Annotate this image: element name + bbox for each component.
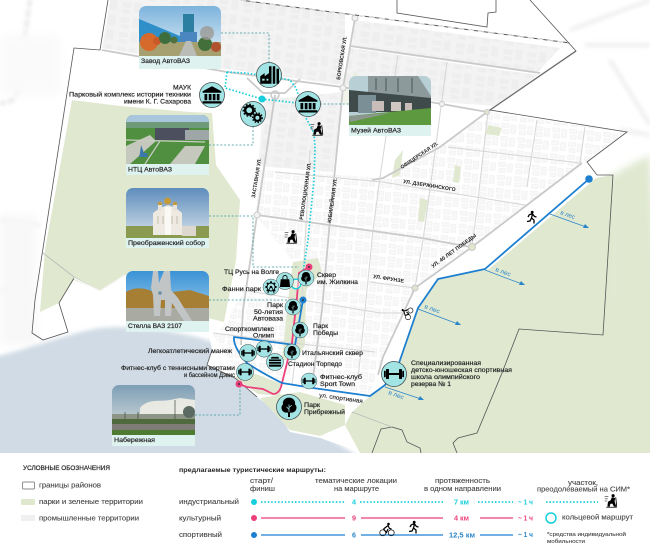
row: cultural: 9 (352, 514, 356, 522)
row: cultural (179, 514, 533, 522)
icon: dumbbell школа (382, 362, 406, 386)
legend: routes table: преодолеваемый на СИМ* (537, 486, 630, 494)
forest area (345, 175, 650, 453)
arrows: to the forest (385, 209, 589, 401)
route: sport (234, 175, 593, 396)
legend: map symbols: парки и зеленые территории (39, 499, 143, 506)
location labels: и бассейном Дэвис (184, 371, 236, 379)
street names: ЗАСТАВНАЯ УЛ. (251, 157, 263, 198)
photo card: НТЦ АвтоВАЗ: НТЦ АвтоВАЗ (128, 166, 172, 174)
street names: УЛ. ДЗЕРЖИНСКОГО (403, 179, 456, 193)
photo card: Завод АвтоВАЗ: Завод АвтоВАЗ (141, 58, 190, 65)
residential (255, 112, 627, 393)
street names: ул. спортивная (319, 393, 363, 405)
icon: museum МАУК (200, 82, 224, 108)
dashed leader lines (195, 33, 349, 415)
icon: cyclist (399, 305, 414, 320)
photo card: Стелла ВАЗ 2107: Стелла ВАЗ 2107 (128, 323, 182, 330)
location labels: Легкоатлетический манеж (148, 347, 233, 355)
legend: routes table: тематические локации (315, 478, 397, 485)
icon: tree Парк 50-летия (285, 299, 301, 315)
street names: ЮБИЛЕЙНАЯ УЛ. (325, 177, 339, 223)
route: cultural (236, 264, 312, 394)
row: cultural: 4 км (454, 514, 469, 522)
footnote (547, 531, 626, 545)
legend: map symbols: границы районов (39, 482, 101, 490)
icon: scooter rider south (285, 230, 297, 243)
location labels: Парковый комплекс истории техники (69, 90, 191, 98)
row: sport: спортивный (179, 531, 222, 539)
icon: Музей АвтоВАЗ (296, 92, 320, 116)
photo card: Завод АвтоВАЗ (139, 6, 221, 69)
icon: ferris wheel (263, 279, 279, 295)
street names: РЕВОЛЮЦИОННАЯ УЛ. (299, 162, 313, 220)
row: industrial (179, 498, 598, 506)
street names: БОРКОВСКАЯ УЛ. (336, 35, 349, 80)
location labels: им. Жилкина (317, 279, 358, 286)
legend: routes table: старт/ (250, 478, 273, 485)
icon: factory (256, 62, 282, 88)
location labels: резерва № 1 (411, 381, 451, 388)
district boundaries (32, 0, 108, 340)
legend: routes table (179, 467, 634, 545)
location labels: имени К. Г. Сахарова (124, 98, 191, 106)
legend: map symbols (21, 465, 143, 522)
city parks (282, 258, 322, 360)
legend: map symbols: УСЛОВНЫЕ ОБОЗНАЧЕНИЯ (23, 465, 110, 472)
photo card: Музей АвтоВАЗ (349, 76, 431, 136)
location labels: Прибрежный (304, 408, 345, 416)
park zone west (40, 100, 240, 322)
row: sport: 6 (352, 530, 356, 540)
railway (240, 0, 570, 43)
icon: tree Парк Победы (292, 322, 308, 338)
location labels: ТЦ Русь на Волге (224, 269, 279, 276)
icon: shopping bag (276, 272, 294, 290)
legend: ring route: кольцевой маршрут (562, 514, 634, 522)
icon: stadium (266, 354, 284, 370)
roads (102, 50, 487, 112)
location labels: Итальянский сквер (302, 349, 363, 357)
icon: tree Итальянский сквер (284, 344, 300, 360)
icon: legend cyclist (380, 523, 394, 536)
photo card: Музей АвтоВАЗ: Музей АвтоВАЗ (351, 126, 401, 134)
location labels: Стадион Торпедо (288, 361, 342, 368)
legend: routes table: участок, (568, 480, 598, 487)
legend: map symbols: промышленные территории (39, 516, 139, 522)
icon: dumbbell Дэвис (236, 364, 254, 380)
icon: dumbbell Олимп (256, 341, 272, 357)
forest fading edge (608, 155, 650, 320)
icon: runner (527, 211, 536, 224)
icon: gears НТЦ (240, 102, 266, 126)
location labels: детско-юношеская спортивная (411, 367, 512, 374)
route: industrial (225, 72, 315, 272)
row: cultural: культурный (179, 514, 221, 522)
industrial zones (102, 0, 345, 85)
photo card: Преображенский собор: Преображенский собор (128, 239, 205, 247)
row: industrial: ~ 1 ч (518, 498, 533, 506)
row: sport: ~ 1 ч (518, 530, 533, 539)
street names: ОФИЦЕРСКАЯ УЛ. (400, 141, 440, 171)
icon: scooter rider north (311, 122, 323, 135)
row: industrial: 7 км (454, 498, 469, 506)
location labels: МАУК (173, 84, 191, 92)
water (0, 325, 356, 453)
photo card: Преображенский собор (126, 188, 209, 248)
location labels: Победы (313, 329, 338, 337)
icon: tree Прибрежный (276, 394, 302, 420)
street names: УЛ. ФРУНЗЕ (373, 274, 405, 285)
location labels: школа олимпийского (411, 373, 480, 381)
row: sport: 12,5 км (449, 530, 475, 540)
icon: legend scooter (605, 494, 617, 507)
arrows: to the forest: в лес (494, 266, 512, 278)
arrows: to the forest: в лес (559, 209, 576, 221)
icon: dumbbell манеж (240, 344, 256, 362)
location labels: 50-летия (254, 309, 283, 316)
row: industrial: 4 (352, 498, 356, 506)
location labels: Фанни парк (222, 286, 261, 293)
street names (251, 35, 478, 405)
location labels: Парк (304, 402, 320, 409)
icon: dumbbell Sport Town (301, 373, 317, 389)
location labels (69, 84, 512, 416)
photo card: Набережная: Набережная (114, 436, 155, 444)
location labels: Sport Town (320, 381, 355, 388)
legend: routes table: в одном направлении (424, 486, 501, 493)
location labels: Парк (313, 323, 328, 330)
photo card: Стелла ВАЗ 2107 (126, 271, 209, 332)
location labels: Фитнес-клуб (320, 373, 362, 381)
footnote: *средства индивидуальной (547, 531, 626, 538)
arrows: to the forest: в лес (423, 303, 441, 315)
location labels: Олимп (253, 332, 274, 340)
row: industrial: индустриальный (179, 498, 239, 506)
location labels: Парк (267, 302, 283, 309)
legend: routes table: предлагаемые туристические маршруты: (179, 467, 326, 474)
legend: routes table: на маршруте (334, 486, 379, 493)
arrows: to the forest: в лес (387, 389, 405, 401)
legend: routes table: протяженность (435, 478, 490, 485)
photo card: Набережная (112, 385, 195, 446)
legend: ring route (546, 513, 634, 523)
photo card: НТЦ АвтоВАЗ (126, 115, 209, 175)
location labels: Специализированная (411, 360, 481, 367)
location labels: Фитнес-клуб с теннисными кортами (121, 364, 235, 372)
legend: routes table: финиш (250, 486, 276, 493)
ring route marker (291, 279, 301, 289)
row: sport (179, 530, 533, 540)
location labels: Сквер (317, 272, 336, 279)
location labels: Автоваза (253, 316, 283, 322)
row: cultural: ~ 1 ч (518, 514, 533, 522)
icon: legend runner (409, 521, 418, 534)
street names: УЛ. 40 ЛЕТ ПОБЕДЫ (431, 233, 478, 270)
footnote: мобильности (547, 539, 585, 545)
location labels: Спорткомплекс (225, 326, 275, 333)
icon: tree Сквер Жилкина (298, 270, 314, 286)
